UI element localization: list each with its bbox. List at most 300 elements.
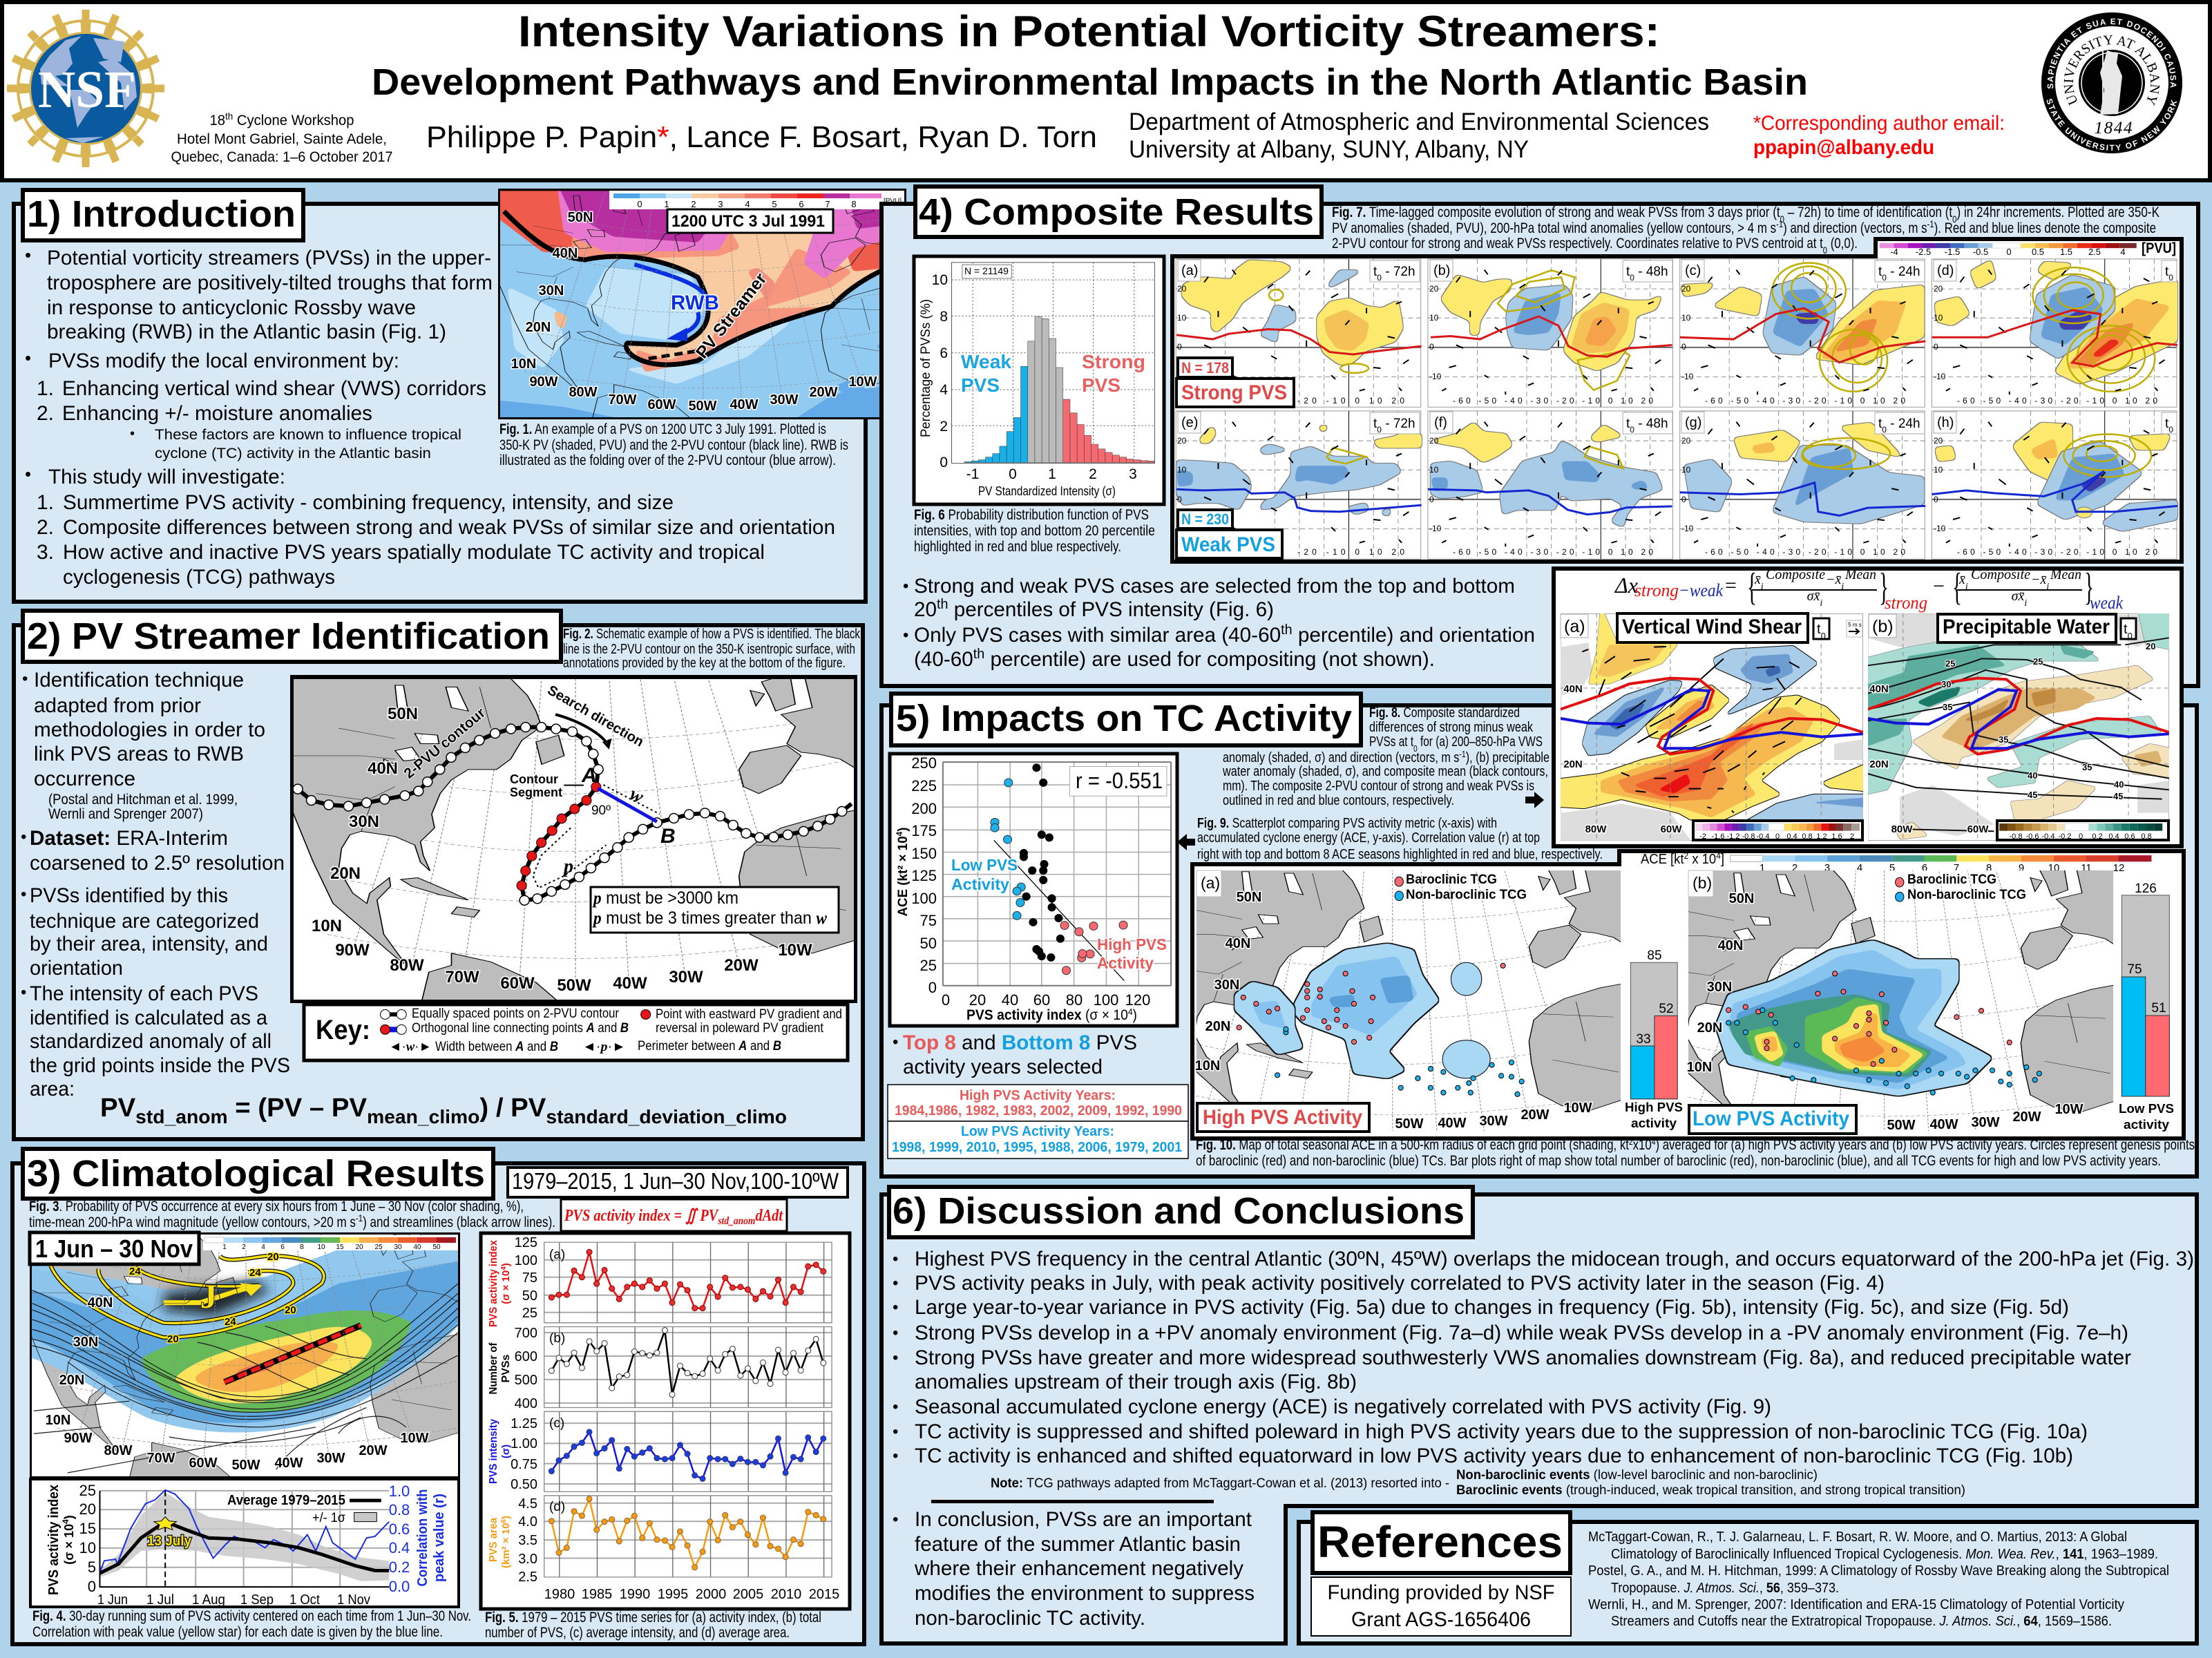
- figure 4: activity time series: 10: [79, 1539, 96, 1556]
- figure 10 map b: low activity: 50W: [1887, 1118, 1916, 1133]
- introduction text: PVSs modify the local environment by:: [48, 350, 399, 372]
- figure 7 panel labels: t0: [2165, 265, 2173, 283]
- figure 8a colour bar: -2: [1699, 832, 1706, 841]
- figure 10 bar chart b: [2119, 882, 2174, 1132]
- compositing text: Strong and weak PVS cases are selected from the top and bottom: [914, 575, 1515, 598]
- figure 5: PVS time series: 1995: [658, 1587, 688, 1602]
- figure 5: PVS time series: 125: [515, 1235, 537, 1250]
- figure 5: PVS time series: 1985: [582, 1587, 612, 1602]
- figure 8b labels: 35: [1999, 734, 2008, 745]
- low activity years table: Low PVS Activity Years:: [961, 1124, 1114, 1139]
- standardized anomaly equation: standard_deviation_climo: [546, 1106, 787, 1127]
- figure 5: PVS time series: (c): [549, 1416, 564, 1431]
- figure 10 map b: low activity: 40N: [1718, 938, 1743, 953]
- difference equation: −x̄i: [2031, 572, 2049, 591]
- figure 3 colour bar: 15: [336, 1244, 344, 1251]
- figure 5: PVS time series: 500: [515, 1373, 537, 1388]
- figure 1 colour bar: 8: [851, 199, 857, 209]
- funding box: Grant AGS-1656406: [1351, 1608, 1531, 1631]
- figure 10 colour bar: 8: [1986, 862, 1992, 874]
- figure 8b labels: 45: [2113, 791, 2123, 801]
- concluding statement: modifies the environment to suppress: [915, 1582, 1255, 1605]
- figure 5: PVS time series: [481, 1233, 850, 1609]
- figure 6: PDF histogram: PV Standardized Intensity (σ): [978, 484, 1116, 498]
- concluding statement: •: [893, 1510, 898, 1529]
- introduction text: •: [25, 464, 31, 484]
- figure 2 key: ◄·w·►: [389, 1040, 432, 1054]
- difference equation: −: [1933, 575, 1945, 598]
- introduction text: Composite differences between strong and weak PVSs of similar size and orientation: [63, 516, 835, 539]
- figure 7 axis numbers: 20: [1429, 284, 1439, 294]
- TCG note: Non-baroclinic events (low-level baroclinic and non-baroclinic): [1456, 1468, 1818, 1483]
- figure 5 caption: [485, 1610, 821, 1641]
- figure 6: PDF histogram: [914, 256, 1164, 504]
- compositing text: •: [903, 577, 908, 595]
- figure 8b colour bar: 0.4: [2108, 832, 2119, 841]
- figure 5: PVS time series: PVS area: [488, 1518, 499, 1562]
- figure 8 caption: outlined in red and blue contours, respectively.: [1223, 793, 1454, 808]
- panel (a): [1176, 259, 1422, 407]
- figure 10 map a: high activity: 10N: [1195, 1058, 1220, 1074]
- figure 7 axis numbers: 20: [1681, 436, 1691, 446]
- figure 10 colour bar: 1: [1760, 862, 1765, 874]
- figure 10 bar chart b: 51: [2151, 1001, 2166, 1016]
- figure 3 jet label: J: [200, 1277, 217, 1315]
- figure 2 labels: Search direction: [545, 683, 646, 750]
- figure 9 caption: [1197, 816, 1603, 862]
- figure 7 colour bar: -4: [1890, 247, 1898, 257]
- figure 8b labels: 35: [2082, 762, 2092, 772]
- conclusion bullets: •: [893, 1298, 898, 1317]
- figure 3 map labels: 24: [129, 1266, 141, 1277]
- conclusion bullets: Strong PVSs have greater and more widespread southwesterly VWS anomalies downstream (Fig. 8a), and reduced precipitable water: [915, 1346, 2131, 1369]
- figure 3 map labels: 90W: [64, 1431, 93, 1446]
- figure 3: PVS probability map: [11, 1230, 479, 1483]
- figure 8 caption: differences of strong minus weak: [1369, 720, 1534, 735]
- difference equation: Composite: [1766, 566, 1825, 582]
- figure 8b colour bar: 0.2: [2092, 832, 2103, 841]
- figure 7 axis numbers: 20: [1934, 284, 1943, 294]
- figure 6 caption: Fig. 6 Probability distribution function of PVS: [914, 507, 1149, 523]
- figure 2 labels: A: [581, 764, 597, 787]
- figure 8b labels: 60W: [1967, 823, 1989, 835]
- figure 6: PDF histogram: 0: [940, 455, 948, 470]
- figure 10 map a: high activity: 30W: [1479, 1114, 1508, 1129]
- figure 8a colour bar: 2: [1850, 832, 1854, 841]
- figure 2 labels: p: [562, 856, 573, 877]
- arrow: to figure 8: [1525, 792, 1544, 808]
- figure 8a colour bar: -1.2: [1727, 832, 1739, 841]
- figure 3 caption: time-mean 200-hPa wind magnitude (yellow contours, >20 m s-1) and streamlines (black arrow lines).: [29, 1212, 555, 1230]
- figure 7 panel labels: (h): [1937, 415, 1954, 430]
- figure 2 criteria callout: [591, 887, 839, 933]
- figure 7 axis numbers: 10: [1177, 465, 1187, 475]
- figure 6: PDF histogram: Weak: [961, 351, 1011, 372]
- figure 10 map b: low activity: 40W: [1929, 1117, 1958, 1132]
- figure 8b colour bar: [1997, 821, 2168, 841]
- TCG note: Baroclinic events (trough-induced, weak tropical transition, and strong tropical transition): [1456, 1483, 1965, 1498]
- figure 9: scatterplot: 50: [920, 935, 937, 952]
- figure 6: PDF histogram: -1: [966, 466, 979, 482]
- figure 2 labels: 60W: [500, 974, 535, 993]
- figure 1 annotations: 80W: [569, 385, 598, 400]
- figure 10 map a: high activity: 50N: [1237, 890, 1261, 905]
- introduction text: This study will investigate:: [48, 466, 285, 488]
- icon: University at Albany seal: STATE UNIVERSITY OF NEW YORK: [2046, 99, 2177, 151]
- figure 7 axis numbers: 10: [1177, 313, 1187, 323]
- conclusion bullets: Highest PVS frequency in the central Atlantic (30ºN, 45ºW) overlaps the midocean trough, and occurs equatorward of the 200-hPa jet (Fig. 3): [915, 1248, 2194, 1270]
- figure 10 colour bar: 4: [1857, 862, 1862, 874]
- figure 5: PVS time series: (σ × 104): [500, 1263, 512, 1304]
- figure 1 caption: Fig. 1. An example of a PVS on 1200 UTC 3 July 1991. Plotted is: [499, 421, 826, 437]
- figure 1: PV streamer map: [498, 189, 906, 419]
- figure 5: PVS time series: PVS intensity: [488, 1419, 499, 1484]
- figure 7 panel labels: t0 - 48h: [1626, 265, 1668, 283]
- figure 1 annotations: PV Streamer: [692, 269, 771, 362]
- figure 4: activity time series: 1 Aug: [192, 1592, 225, 1608]
- reference list: [1588, 1530, 2169, 1629]
- panel: 4 Composite Results: [881, 187, 2198, 686]
- compositing text: (40-60th percentile) are used for compositing (not shown).: [914, 647, 1435, 671]
- difference equation: x̄i: [1958, 572, 1968, 591]
- figure 2 key: Key:: [316, 1015, 370, 1045]
- figure 4: activity time series: 5: [88, 1559, 96, 1576]
- figure 7 axis numbers: -10: [1681, 524, 1694, 533]
- figure 8a colour bar: 0: [1775, 832, 1780, 841]
- panel (f): [1428, 411, 1672, 559]
- introduction text: Summertime PVS activity - combining frequency, intensity, and size: [63, 491, 674, 514]
- figure 9: scatterplot: 75: [920, 912, 937, 929]
- figure 10 colour bar: 7: [1954, 862, 1959, 874]
- identification text: orientation: [30, 957, 123, 980]
- figure 9: scatterplot: Activity: [1097, 954, 1154, 972]
- figure 8 caption: anomaly (shaded, σ) and direction (vectors, m s-1), (b) precipitable: [1223, 749, 1550, 765]
- introduction text: Potential vorticity streamers (PVSs) in the upper-: [47, 247, 491, 269]
- figure 7 panel labels: (b): [1433, 263, 1450, 278]
- figure 10 colour bar: 2: [1792, 862, 1798, 874]
- figure 8 caption: Fig. 8. Composite standardized: [1369, 705, 1520, 721]
- figure 10 map a: high activity: (a): [1201, 874, 1220, 892]
- figure 8a colour bar: [1693, 821, 1862, 841]
- affiliation: [1129, 108, 1709, 163]
- figure 5: PVS time series: 0.50: [511, 1477, 537, 1492]
- figure 5: PVS time series: 75: [522, 1270, 537, 1286]
- icon: University at Albany seal: UNIVERSITY AT ALBANY: [2064, 35, 2159, 106]
- panel: References: [1299, 1512, 2197, 1643]
- figure 6: PDF histogram: 8: [940, 309, 948, 325]
- difference equation: strong: [1634, 580, 1679, 600]
- figure 10 bar chart a: High PVS: [1625, 1100, 1683, 1114]
- identification text: [21, 669, 290, 1100]
- figure 9: scatterplot: 0: [942, 991, 950, 1009]
- figure 1 colour bar: 6: [799, 199, 804, 209]
- difference equation: Δx: [1614, 573, 1638, 598]
- figure 7 axis numbers: -60 -50 -40 -30 -20 -10 0 10 20: [1453, 396, 1653, 406]
- figure 2: PVS identification schematic: [283, 674, 863, 1007]
- figure 9: scatterplot: 175: [911, 822, 937, 839]
- figure 8 caption: PVSs at t0 for (a) 200–850-hPa VWS: [1369, 734, 1543, 753]
- identification text: methodologies in order to: [34, 718, 265, 741]
- figure 5: PVS time series: Number of: [488, 1342, 499, 1394]
- figure 5: PVS time series: 2005: [733, 1587, 763, 1602]
- figure 3 map labels: 30N: [73, 1335, 98, 1350]
- figure 4: activity time series: 15: [79, 1520, 96, 1537]
- heading: Composite Results: 4) Composite Results: [919, 191, 1314, 233]
- figure 10 colour bar: 9: [2019, 862, 2024, 874]
- figure 8a colour bar: 0.4: [1786, 832, 1798, 841]
- conclusion bullets: •: [893, 1274, 898, 1293]
- standardized anomaly equation: mean_climo: [367, 1106, 479, 1127]
- figure 8 caption: water anomaly (shaded, σ), and composite mean (black contours,: [1222, 764, 1548, 779]
- figure 9 caption: right with top and bottom 8 ACE seasons highlighted in red and blue, respectively.: [1197, 847, 1603, 862]
- figure 2 caption: annotations provided by the key at the bottom of the figure.: [563, 656, 846, 671]
- figure 6: PDF histogram: 4: [940, 382, 948, 398]
- figure 7 axis numbers: 0: [1429, 495, 1434, 504]
- PVS activity index formula: PVS activity index = ∬ PV: [564, 1207, 746, 1225]
- figure 2 labels: 50W: [557, 976, 591, 995]
- figure 5: PVS time series: 4.5: [518, 1496, 537, 1512]
- figure 6: PDF histogram: 1: [1048, 466, 1056, 482]
- identification text: area:: [30, 1078, 75, 1100]
- figure 8a heading: (a): [1564, 617, 1585, 636]
- identification text: coarsened to 2.5º resolution: [30, 852, 285, 875]
- funding box: [1311, 1577, 1571, 1636]
- high activity years table: 1984,1986, 1982, 1983, 2002, 2009, 1992, 1990: [895, 1103, 1182, 1118]
- figure 7 colour bar: -0.5: [1973, 247, 1988, 257]
- figure 5: PVS time series: 400: [515, 1396, 537, 1411]
- difference equation: −weak: [1679, 580, 1723, 600]
- figure 8b heading: Precipitable Water: [1943, 616, 2110, 638]
- figure 4: activity time series: peak value (r): [432, 1494, 447, 1582]
- panel: 1 Introduction: [14, 182, 924, 602]
- figure 7 axis numbers: 20: [1681, 284, 1691, 294]
- heading: Climatological Results: 3) Climatological Results: [27, 1153, 485, 1194]
- figure 7 caption: 2-PVU contour for strong and weak PVSs respectively. Coordinates relative to PVS centroid at t0 (0,0).: [1332, 236, 1858, 256]
- PVS activity index formula: std_anom: [717, 1215, 755, 1227]
- figure 8b labels: 80W: [1891, 823, 1913, 835]
- PVS activity index formula: [561, 1199, 787, 1231]
- figure 1 annotations: 50N: [568, 210, 593, 225]
- identification text: identified is calculated as a: [30, 1007, 267, 1029]
- figure 8a heading: t0: [1817, 622, 1826, 641]
- figure 8b labels: 35: [1943, 702, 1952, 712]
- figure 1 annotations: 70W: [608, 392, 637, 408]
- figure 3 period tag: 1 Jun – 30 Nov: [35, 1235, 193, 1263]
- figure 8b labels: 40: [2028, 770, 2037, 781]
- introduction text: 1.: [37, 377, 54, 400]
- figure 8b labels: 20: [2146, 641, 2155, 651]
- figure 1 caption: [499, 421, 848, 468]
- figure 3 map labels: 10W: [400, 1431, 429, 1446]
- identification text: •: [21, 983, 26, 1002]
- figure 10 map a: high activity: Baroclinic TCG: [1406, 873, 1497, 887]
- figure 1 annotations: [511, 210, 877, 414]
- figure 7 axis numbers: -10: [1934, 372, 1946, 381]
- figure 7 axis numbers: 0: [1681, 495, 1686, 504]
- figure 3 colour bar: 6: [280, 1244, 285, 1251]
- concluding statement: feature of the summer Atlantic basin: [915, 1533, 1241, 1556]
- figure 9: scatterplot: 100: [1094, 991, 1118, 1009]
- figure 10: ACE maps: [1147, 850, 2184, 1159]
- figure 10 map a: high activity: Non-baroclinic TCG: [1406, 888, 1527, 902]
- figure 7 axis numbers: 20: [1177, 436, 1187, 446]
- figure 5: PVS time series: 1.00: [511, 1436, 537, 1451]
- identification text: •: [21, 885, 26, 904]
- difference equation: −x̄i: [1826, 572, 1844, 591]
- figure 3 map labels: 50W: [231, 1458, 260, 1473]
- figure 7 axis numbers: 10: [1681, 313, 1691, 323]
- figure 4: activity time series: [30, 1479, 459, 1608]
- heading: Discussion and Conclusions: 6) Discussion and Conclusions: [893, 1190, 1465, 1232]
- figure 2 labels: 20N: [330, 864, 361, 883]
- figure 8 caption: mm). The composite 2-PVU contour of strong and weak PVSs is: [1223, 779, 1534, 794]
- figure 2 labels: 90W: [335, 941, 370, 960]
- panel (d): [1932, 259, 2177, 407]
- figure 2 labels: 30W: [669, 968, 703, 987]
- figure 10 bar chart a: activity: [1631, 1116, 1677, 1130]
- figure 4: activity time series: 20: [79, 1500, 96, 1518]
- figure 7 axis numbers: 10: [1934, 313, 1943, 323]
- conclusion bullets: [893, 1248, 2194, 1467]
- figure 2 caption: line is the 2-PVU contour on the 350-K isentropic surface, with: [563, 642, 855, 657]
- conclusion bullets: TC activity is suppressed and shifted poleward in high PVS activity years due to the suppression of non-baroclinic TCG (Fig. 10a): [915, 1420, 2088, 1443]
- figure 7 axis numbers: 20: [1429, 436, 1439, 446]
- figure 10 map b: low activity: Baroclinic TCG: [1907, 873, 1996, 887]
- conclusion bullets: •: [893, 1422, 898, 1441]
- figure 5: PVS time series: 100: [515, 1253, 537, 1268]
- figure 9: scatterplot: ACE (kt² × 104): [895, 828, 910, 916]
- figure 1 colour bar: 0: [637, 199, 642, 209]
- selected years text: [893, 1031, 1137, 1078]
- figure 7 panel labels: t0: [2165, 417, 2173, 435]
- figure 10 colour bar: 5: [1889, 862, 1895, 874]
- figure 1 colour bar: 5: [772, 199, 777, 209]
- difference equation: σx̄i: [1807, 589, 1822, 608]
- figure 7 axis numbers: -60 -50 -40 -30 -20 -10 0 10 20: [1957, 396, 2157, 406]
- panel: 2 PV Streamer Identification: [14, 611, 863, 1139]
- figure 3 caption: Fig. 3. Probability of PVS occurrence at every six hours from 1 June – 30 Nov (color shading, %),: [29, 1199, 524, 1214]
- figure 8a labels: 20N: [1563, 759, 1583, 770]
- heading: Introduction: 1) Introduction: [27, 193, 296, 235]
- introduction text: 1.: [37, 491, 54, 514]
- conclusion bullets: PVS activity peaks in July, with peak activity positively correlated to PVS activity later in the season (Fig. 4): [915, 1272, 1885, 1295]
- figure 5: PVS time series: PVSs: [500, 1354, 512, 1382]
- figure 8b heading: (b): [1872, 617, 1894, 636]
- introduction text: troposphere are positively-tilted troughs that form: [47, 271, 493, 294]
- figure 10 colour bar: 11: [2081, 862, 2092, 874]
- figure 8 panel a: vertical wind shear: [1547, 606, 1875, 841]
- figure 9: scatterplot: High PVS: [1097, 935, 1167, 953]
- figure 5: PVS time series: 2015: [809, 1587, 839, 1602]
- figure 4: activity time series: 0.2: [389, 1559, 410, 1576]
- figure 5 caption: Fig. 5. 1979 – 2015 PVS time series for (a) activity index, (b) total: [485, 1610, 821, 1626]
- identification text: •: [22, 669, 28, 688]
- panel (e): [1176, 411, 1422, 559]
- standardized anomaly equation: = (PV – PV: [228, 1094, 368, 1123]
- figure 4: activity time series: 1.0: [389, 1483, 410, 1500]
- figure 7 axis numbers: -20 -10 0 10 20: [1297, 547, 1404, 557]
- workshop information: Quebec, Canada: 1–6 October 2017: [171, 149, 392, 165]
- figure 3 map labels: 70W: [146, 1451, 175, 1466]
- figure 10 caption: [1196, 1136, 2195, 1169]
- panel (g): [1680, 411, 1925, 559]
- figure 1 annotations: 40N: [553, 246, 578, 261]
- figure 5: PVS time series: 600: [515, 1349, 537, 1364]
- figure 8b colour bar: 0.8: [2141, 832, 2152, 841]
- figure 5: PVS time series: 1.25: [511, 1416, 537, 1431]
- figure 8b labels: 40N: [1869, 683, 1889, 695]
- figure 6 caption: intensities, with top and bottom 20 percentile: [914, 523, 1155, 539]
- figure 4: activity time series: 0: [88, 1578, 96, 1595]
- figure 8b colour bar: -0.8: [2010, 832, 2022, 841]
- period label: 1979–2015, 1 Jun–30 Nov,100-10ºW: [512, 1168, 839, 1194]
- figure 8a colour bar: 0.8: [1802, 832, 1813, 841]
- figure 6: PDF histogram: 0: [1009, 466, 1017, 482]
- figure 6: PDF histogram: Strong: [1082, 351, 1145, 372]
- figure 2 caption: [563, 627, 861, 671]
- TCG note: [991, 1468, 1965, 1498]
- figure 10 bar chart b: activity: [2124, 1118, 2169, 1132]
- high PVS activity tag: High PVS Activity: [1203, 1106, 1362, 1129]
- compositing text: Only PVS cases with similar area (40-60th percentile) and orientation: [914, 622, 1535, 647]
- introduction text: •: [25, 245, 31, 265]
- figure 8a heading: 5 m s: [1848, 622, 1862, 628]
- conclusion bullets: •: [893, 1250, 898, 1268]
- figure 5 caption: number of PVS, (c) average intensity, and (d) average area.: [485, 1625, 790, 1641]
- figure 10 map b: low activity: 30N: [1707, 980, 1732, 995]
- figure 4: activity time series: 0.0: [389, 1578, 410, 1595]
- figure 3 colour bar: 8: [300, 1244, 304, 1251]
- introduction text: •: [130, 426, 135, 441]
- figure 9: scatterplot: PVS activity index (σ × 104): [966, 1006, 1137, 1023]
- introduction text: in response to anticyclonic Rossby wave: [47, 296, 416, 319]
- figure 1 colour bar: [PVU]: [884, 198, 902, 205]
- figure 8b heading: t0: [2124, 622, 2133, 641]
- figure 8a colour bar: -0.8: [1742, 832, 1755, 841]
- introduction text: Enhancing +/- moisture anomalies: [62, 402, 372, 425]
- panel (h): [1932, 411, 2177, 559]
- figure 3 colour bar: 1: [222, 1244, 227, 1251]
- high activity years table: High PVS Activity Years:: [960, 1088, 1116, 1103]
- title: Intensity Variations in Potential Vorticity Streamers:: [518, 8, 1660, 56]
- figure 10 map a: high activity: 30N: [1214, 978, 1239, 993]
- icon: University at Albany seal: [2041, 12, 2182, 153]
- reference list: Tropopause. J. Atmos. Sci., 56, 359–373.: [1611, 1581, 1839, 1596]
- figure 9: scatterplot: 25: [920, 957, 937, 974]
- figure 8a colour bar: -0.4: [1757, 832, 1769, 841]
- figure 8b labels: 25: [2033, 656, 2043, 667]
- figure 4: activity time series: 25: [79, 1482, 96, 1499]
- figure 7 panel labels: t0 - 72h: [1373, 417, 1415, 435]
- identification text: The intensity of each PVS: [30, 982, 258, 1005]
- heading: PV Streamer Identification: 2) PV Streamer Identification: [27, 616, 550, 657]
- figure 6: PDF histogram: 2: [940, 419, 948, 435]
- conclusion bullets: •: [893, 1447, 898, 1465]
- figure 7 colour bar: 2.5: [2088, 247, 2101, 257]
- figure 1 colour bar: 3: [718, 199, 723, 209]
- figure 2 labels: 10N: [312, 917, 342, 935]
- figure 6 caption: highlighted in red and blue respectively.: [914, 539, 1121, 555]
- introduction text: [25, 245, 835, 589]
- difference equation: =: [1725, 574, 1737, 597]
- figure 3 map labels: 20W: [359, 1443, 388, 1458]
- figure 10 map a: high activity: 10W: [1563, 1100, 1592, 1116]
- figure 7 axis numbers: [1177, 284, 2157, 557]
- figure 7 panel labels: [1178, 260, 2177, 435]
- figure 8 caption: [1222, 705, 1550, 808]
- difference equation: weak: [2090, 593, 2123, 613]
- figure 3 colour bar: 10: [317, 1244, 325, 1251]
